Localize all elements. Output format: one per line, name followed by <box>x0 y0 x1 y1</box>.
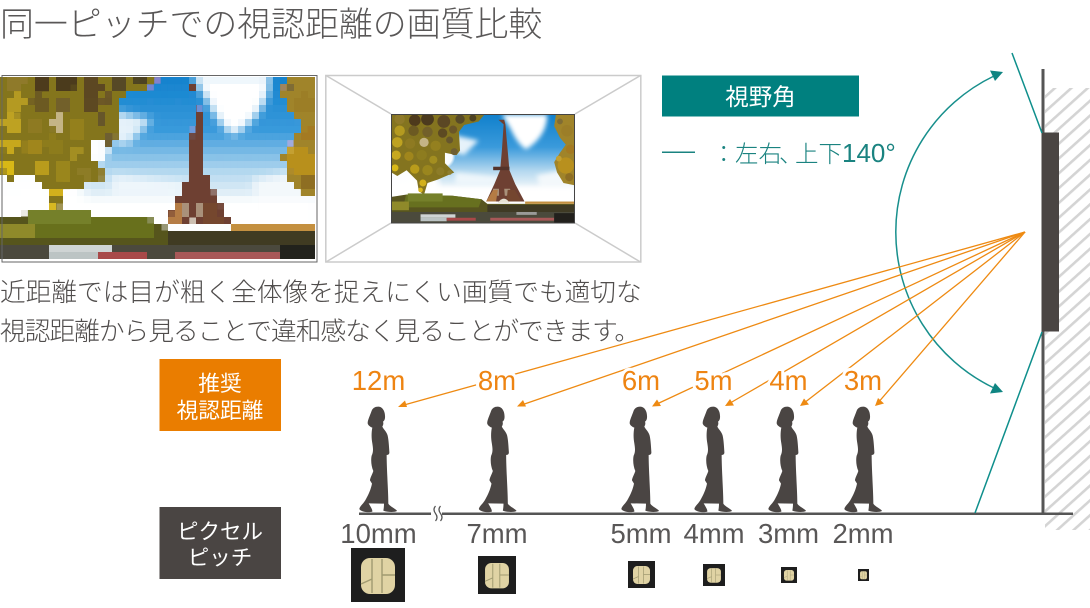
floor <box>359 506 1073 521</box>
title: 同一ピッチでの視認距離の画質比較 <box>0 6 542 44</box>
distance labels <box>352 365 882 396</box>
distance labels: 3m <box>844 365 882 396</box>
wall hatching <box>1045 88 1090 530</box>
distance labels: 4m <box>769 365 808 396</box>
label: recommended viewing distance: 視認距離 <box>177 398 263 423</box>
arrows: recommended viewing distances <box>398 232 1025 407</box>
LED chips <box>351 548 869 602</box>
distance labels: 8m <box>478 365 516 396</box>
distance labels: 12m <box>352 365 405 396</box>
text block: description <box>0 278 642 346</box>
legend: viewing angle <box>662 138 896 168</box>
panel: near view pixelated photo <box>0 72 318 262</box>
display panel <box>1042 132 1059 332</box>
viewing angle arc and boundary lines <box>896 53 1042 513</box>
label: pixel pitch <box>160 507 281 579</box>
pixel pitch labels: 5mm <box>610 518 672 549</box>
pixel pitch labels: 2mm <box>832 518 894 549</box>
pixel pitch labels: 3mm <box>758 518 819 549</box>
pixel pitch labels: 4mm <box>683 518 745 549</box>
legend: viewing angle: 左右 <box>735 141 782 167</box>
legend: viewing angle: 、 <box>779 141 802 167</box>
pixel pitch labels <box>340 518 894 549</box>
pixel pitch labels: 7mm <box>466 518 528 549</box>
pixel pitch labels: 10mm <box>340 518 417 549</box>
distance labels: 6m <box>622 365 660 396</box>
heading: viewing angle <box>662 76 859 116</box>
label: pixel pitch: ピッチ <box>188 546 252 570</box>
legend: viewing angle: 140° <box>842 138 896 168</box>
people silhouettes <box>359 407 882 512</box>
wall <box>1042 69 1044 514</box>
legend: viewing angle: ： <box>712 141 736 167</box>
text block: description: 近距離では目が粗く全体像を捉えにくい画質でも適切な <box>0 278 642 307</box>
label: recommended viewing distance: 推奨 <box>198 371 242 396</box>
panel: distant view in room <box>326 76 641 262</box>
label: recommended viewing distance <box>160 359 281 431</box>
heading: viewing angle: 視野角 <box>725 84 796 110</box>
distance labels: 5m <box>694 365 733 396</box>
legend: viewing angle: 上下 <box>795 141 842 167</box>
text block: description: 視認距離から見ることで違和感なく見ることができます。 <box>0 317 640 346</box>
label: pixel pitch: ピクセル <box>177 520 263 544</box>
